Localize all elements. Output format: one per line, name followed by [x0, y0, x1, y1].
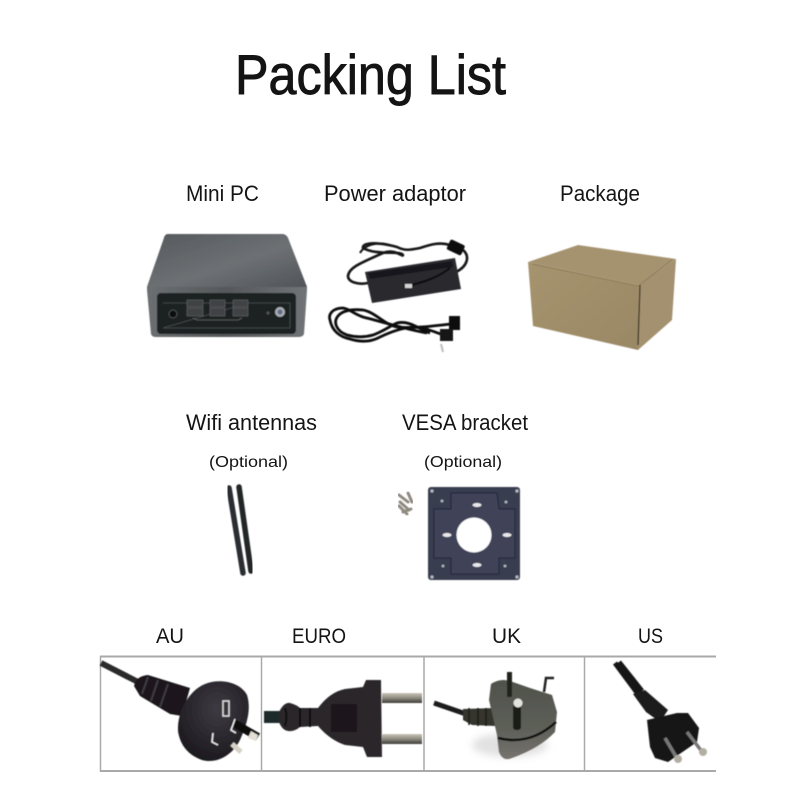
icon: cardboard package — [528, 245, 676, 350]
label: Mini PC: Mini PC — [186, 181, 259, 206]
icon: VESA bracket — [428, 487, 520, 580]
icon: mini PC — [147, 234, 307, 337]
icon: power adaptor and cable — [330, 239, 467, 352]
title: Packing List — [235, 43, 506, 106]
label: Wifi antennas: Wifi antennas — [186, 410, 317, 435]
icon: EURO plug — [264, 680, 422, 757]
icon: US plug — [615, 662, 707, 763]
label: Package: Package — [560, 181, 640, 206]
icon: UK plug — [434, 672, 557, 759]
label: EURO: EURO — [292, 625, 346, 648]
label: UK: UK — [492, 625, 521, 648]
plug comparison table grid — [100, 656, 716, 772]
label: Power adaptor: Power adaptor — [324, 181, 466, 206]
label: Wifi optional: (Optional) — [209, 454, 288, 471]
label: US: US — [638, 625, 663, 648]
label: VESA optional: (Optional) — [424, 454, 502, 471]
label: AU: AU — [156, 625, 184, 648]
label: VESA bracket: VESA bracket — [402, 410, 528, 435]
icon: AU plug — [101, 663, 258, 761]
icon: wifi antennas — [229, 487, 251, 573]
icon: screws — [399, 493, 412, 514]
